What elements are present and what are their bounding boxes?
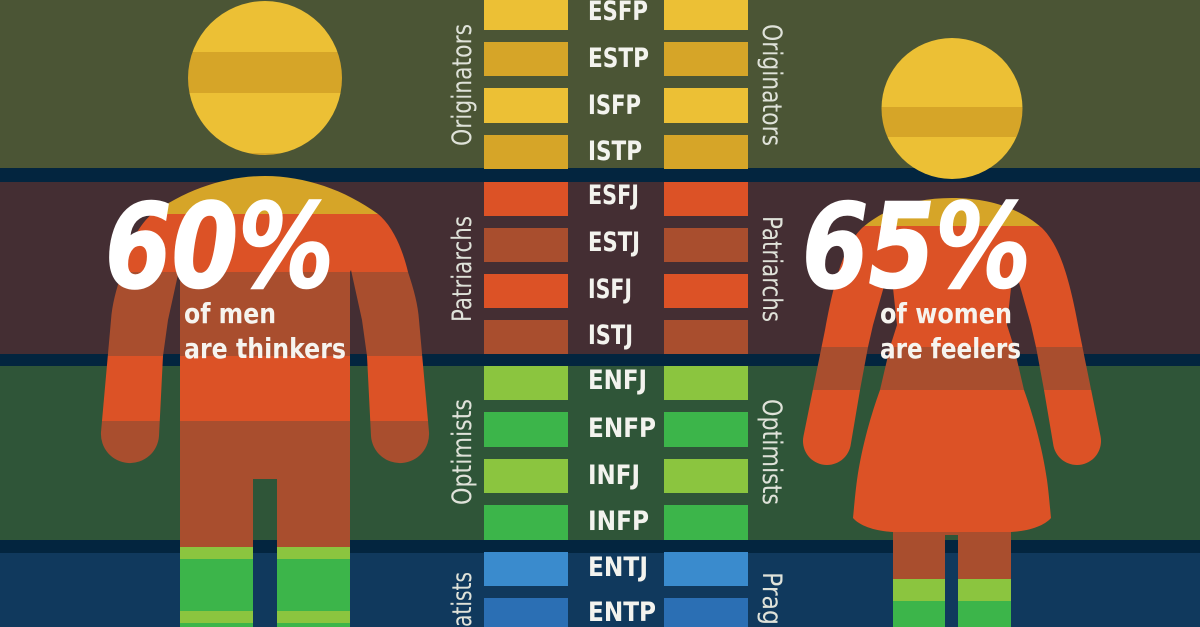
left temperament labels: Optimists bbox=[447, 399, 478, 505]
right temperament labels: Patriarchs bbox=[756, 216, 787, 322]
left temperament labels: Patriarchs bbox=[447, 216, 478, 322]
statistic: women: of women bbox=[880, 297, 1012, 330]
statistic: women: are feelers bbox=[880, 332, 1021, 365]
statistic: men bbox=[105, 178, 346, 365]
personality type labels: ISFP bbox=[588, 90, 641, 121]
personality type labels: ISTJ bbox=[588, 320, 633, 351]
icon: woman head bbox=[880, 36, 1024, 181]
icon: man body bbox=[90, 170, 440, 627]
personality type labels: ESTJ bbox=[588, 227, 640, 258]
right temperament labels: Optimists bbox=[756, 399, 787, 505]
statistic: women bbox=[802, 178, 1031, 365]
right temperament labels bbox=[756, 24, 787, 625]
personality type labels: ISTP bbox=[588, 136, 642, 167]
personality type labels: ESFJ bbox=[588, 180, 639, 211]
personality type labels: ENFJ bbox=[588, 365, 647, 396]
personality type labels: ESTP bbox=[588, 43, 649, 74]
right temperament labels: Originators bbox=[756, 24, 787, 146]
icon: man head bbox=[188, 1, 342, 155]
left colour bars bbox=[484, 0, 568, 627]
statistic: men: of men bbox=[184, 297, 276, 330]
right colour bars bbox=[664, 0, 748, 627]
personality type labels: ISFJ bbox=[588, 274, 632, 305]
statistic: women: 65% bbox=[802, 178, 1031, 315]
statistic: men: are thinkers bbox=[184, 332, 346, 365]
left temperament labels: atists bbox=[447, 572, 478, 627]
personality type labels: ENTJ bbox=[588, 552, 648, 583]
personality type labels bbox=[588, 0, 656, 627]
left temperament labels: Originators bbox=[447, 24, 478, 146]
personality type labels: INFJ bbox=[588, 460, 640, 491]
statistic: men: 60% bbox=[105, 178, 334, 315]
personality type labels: ENFP bbox=[588, 413, 656, 444]
icon: woman body bbox=[800, 195, 1104, 627]
personality type labels: INFP bbox=[588, 506, 649, 537]
left temperament labels bbox=[447, 24, 478, 627]
